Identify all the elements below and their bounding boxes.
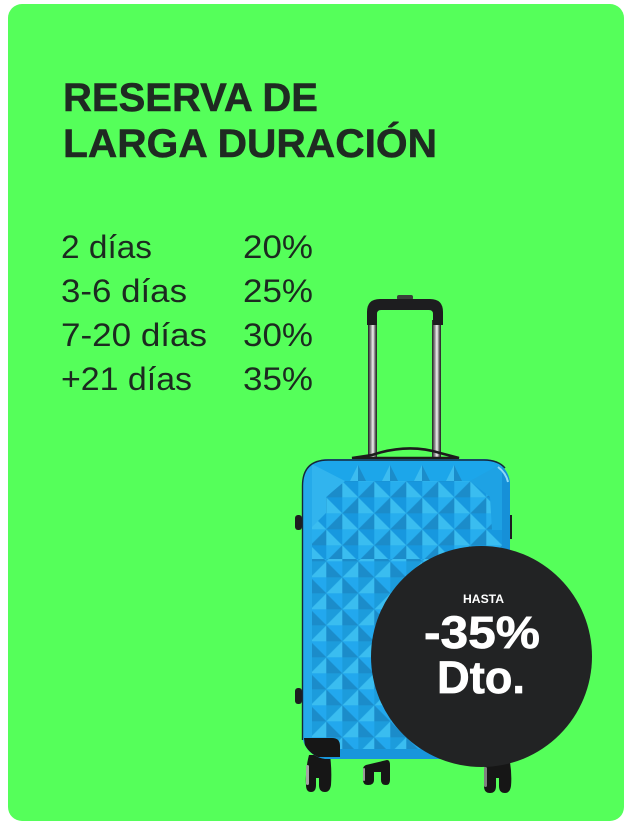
discount table: 3-6 días bbox=[61, 273, 187, 309]
body outline bbox=[302, 460, 505, 740]
top ridge peaks bbox=[350, 465, 462, 481]
discount table bbox=[61, 229, 313, 397]
corner panels bbox=[312, 464, 345, 526]
wheels bbox=[306, 755, 511, 793]
top right highlight bbox=[498, 467, 508, 482]
side latches bbox=[295, 515, 512, 704]
carry handle bbox=[352, 448, 459, 458]
badge: discount circle: Dto. bbox=[437, 652, 525, 703]
title: RESERVA DE bbox=[63, 76, 318, 120]
top band bbox=[302, 459, 510, 481]
discount table: 25% bbox=[243, 273, 313, 309]
discount table: 20% bbox=[243, 229, 313, 265]
illustration: blue suitcase bbox=[295, 295, 512, 793]
side and bottom edges bbox=[303, 465, 312, 754]
badge: discount circle bbox=[371, 546, 592, 767]
title bbox=[63, 76, 437, 166]
discount table: 2 días bbox=[61, 229, 152, 265]
title: LARGA DURACIÓN bbox=[63, 120, 437, 166]
discount table: 30% bbox=[243, 317, 313, 353]
discount table: 35% bbox=[243, 361, 313, 397]
hard shell body bbox=[302, 459, 510, 759]
badge: discount circle: HASTA bbox=[463, 594, 504, 606]
discount table: 7-20 días bbox=[61, 317, 207, 353]
corner bumper bbox=[304, 738, 340, 757]
badge: discount circle: -35% bbox=[424, 607, 540, 658]
telescopic handle bbox=[367, 295, 443, 460]
discount table: +21 días bbox=[61, 361, 192, 397]
